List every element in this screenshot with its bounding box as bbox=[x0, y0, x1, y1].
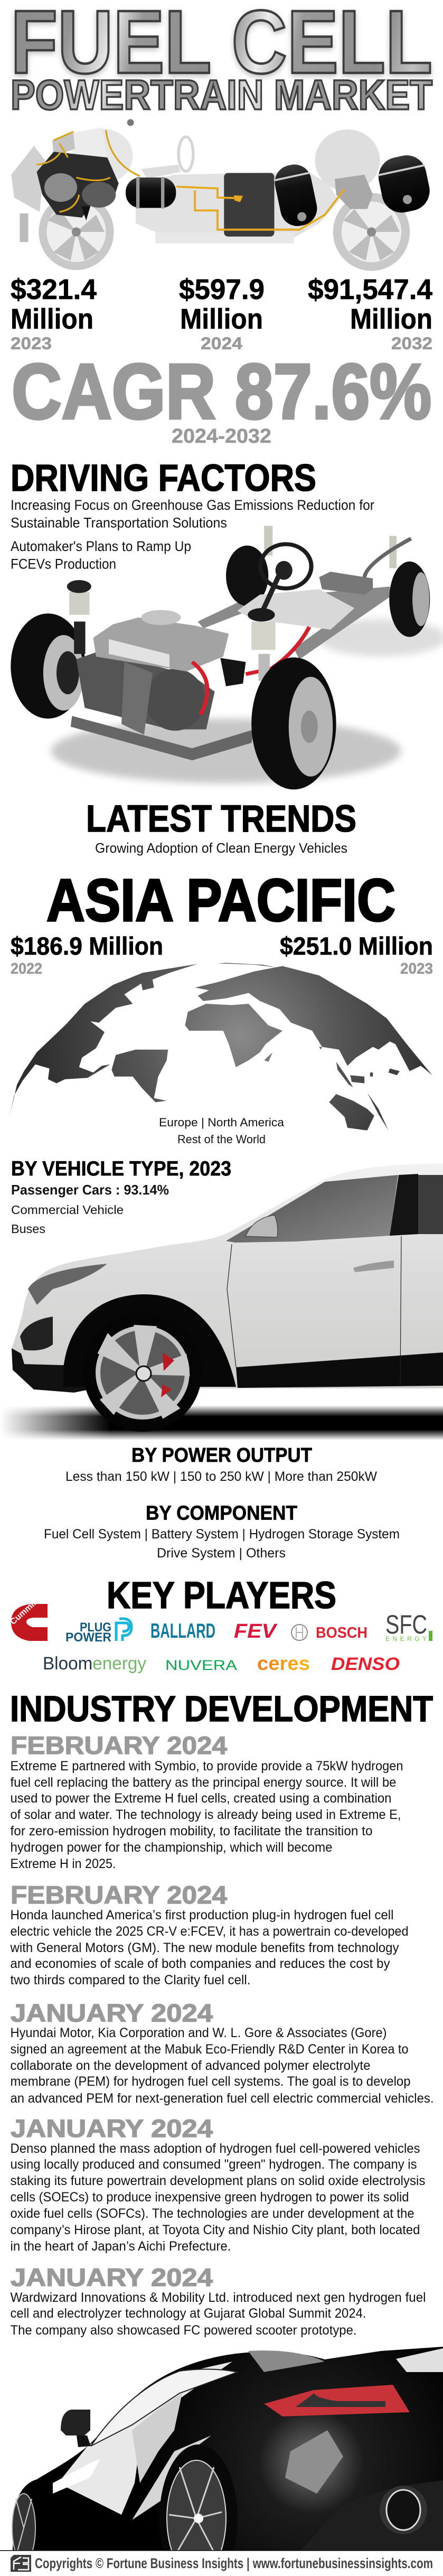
development: January 2024 Hyundai bbox=[11, 1999, 434, 2106]
development: January 2024 Hyundai: collaborate on the development of advanced polymer electrolyte bbox=[11, 2058, 371, 2073]
development: January 2024 Denso bbox=[11, 2114, 426, 2254]
regional stat 2022: 2022 bbox=[11, 960, 42, 977]
development: January 2024 Hyundai: an advanced PEM for next-generation fuel cell electric commercial vehicles. bbox=[11, 2091, 434, 2106]
rear wheels bbox=[226, 546, 430, 637]
logo: Cummins bbox=[8, 1594, 48, 1641]
front left wheel bbox=[11, 613, 86, 718]
development: February 2024 Extreme E: Extreme E partnered with Symbio, to provide provide a 75kW hydrogen bbox=[11, 1759, 403, 1774]
wheel arch bbox=[63, 1294, 236, 1387]
development: January 2024 Hyundai: membrane (PEM) for hydrogen fuel cell systems. The goal is to develop bbox=[11, 2074, 411, 2089]
development: January 2024 Denso: in the heart of Japan’s Aichi Prefecture. bbox=[11, 2239, 231, 2254]
car body bbox=[13, 2347, 443, 2550]
market stat 2032: $91,547.4 bbox=[308, 274, 432, 305]
steering wheel bbox=[260, 544, 312, 611]
logo: Bosch bbox=[291, 1625, 367, 1641]
market stat 2023: 2023 bbox=[11, 334, 52, 353]
development: February 2024 Extreme E: fuel cell replacing the battery as the principal energy source. It will be bbox=[11, 1775, 396, 1790]
illustration: black sports car bbox=[12, 2347, 443, 2550]
mirror bbox=[246, 1215, 278, 1237]
market stat 2023: Million bbox=[11, 303, 93, 335]
regional stat 2022 bbox=[11, 932, 163, 977]
CAGR period: 2024-2032 bbox=[172, 425, 271, 447]
development: January 2024 Denso: cells (SOECs) to produce inexpensive green hydrogen to power its solid bbox=[11, 2190, 409, 2205]
rear posts bbox=[264, 526, 272, 556]
heading: driving factors: DRIVING FACTORS bbox=[11, 458, 316, 499]
exhaust bbox=[380, 2486, 427, 2534]
vehicle type list: Buses bbox=[11, 1222, 45, 1236]
regional stat 2023 bbox=[280, 932, 433, 977]
sensor cap bbox=[127, 119, 134, 126]
other regions list: Europe | North America bbox=[159, 1116, 284, 1129]
yellow hydrogen line bbox=[176, 186, 345, 230]
market stat 2023 bbox=[11, 274, 97, 353]
logo: Ceres: ceres bbox=[257, 1653, 310, 1674]
market stat 2024: 2024 bbox=[201, 334, 242, 353]
logo: SFC Energy: ENERGY bbox=[385, 1635, 427, 1642]
fog light bbox=[20, 1317, 53, 1350]
development: January 2024 Denso: JANUARY 2024 bbox=[11, 2114, 213, 2142]
logo: Nuvera: NUVERA bbox=[165, 1657, 237, 1673]
regional stat 2023: $251.0 Million bbox=[280, 932, 433, 960]
development: January 2024 Wardwizard: The company also showcased FC powered scooter prototype. bbox=[11, 2323, 357, 2338]
latest trends text: Growing Adoption of Clean Energy Vehicles bbox=[95, 840, 347, 856]
car shadow bbox=[0, 1405, 443, 1440]
development: January 2024 Denso: oxide fuel cells (SOFCs). The technologies are under development at the bbox=[11, 2206, 414, 2221]
development: January 2024 Wardwizard: cell and electrolyzer technology at Gujarat Global Summit 2024. bbox=[11, 2306, 366, 2321]
other regions list bbox=[159, 1116, 284, 1146]
logo: SFC Energy: SFC bbox=[385, 1610, 427, 1639]
development: February 2024 Extreme E bbox=[11, 1731, 403, 1871]
development: February 2024 Honda: two thirds compared to the Clarity fuel cell. bbox=[11, 1973, 250, 1987]
door seams bbox=[227, 1236, 401, 1384]
development: February 2024 Honda: and economies of scale of both companies and reduces the cost by bbox=[11, 1956, 390, 1971]
heading: by component: BY COMPONENT bbox=[146, 1502, 297, 1525]
front wheel bbox=[86, 1325, 200, 1432]
development: January 2024 Wardwizard bbox=[11, 2263, 426, 2338]
development: February 2024 Honda: electric vehicle the 2025 CR-V e:FCEV, it has a powertrain co-developed bbox=[11, 1924, 409, 1939]
bumper bbox=[12, 1348, 90, 1393]
logo: Plug Power: POWER bbox=[65, 1630, 111, 1645]
heading: by vehicle type: BY VEHICLE TYPE, 2023 bbox=[11, 1158, 231, 1180]
driving factors list: FCEVs Production bbox=[11, 556, 116, 572]
development: January 2024 Wardwizard: JANUARY 2024 bbox=[11, 2263, 213, 2291]
vehicle type list bbox=[11, 1182, 169, 1236]
component list: Drive System | Others bbox=[157, 1546, 286, 1561]
illustration: white car bbox=[0, 1163, 443, 1440]
logo: Bosch: BOSCH bbox=[316, 1625, 367, 1641]
heading: latest trends: LATEST TRENDS bbox=[86, 798, 356, 840]
development: January 2024 Hyundai: signed an agreement at the Mabuk Eco-Friendly R&D Center in Korea to bbox=[11, 2042, 409, 2057]
side window bbox=[91, 2369, 238, 2446]
mirror bbox=[61, 2410, 91, 2447]
rear wheel bbox=[161, 2444, 238, 2550]
development: February 2024 Extreme E: hydrogen power for the championship, which will become bbox=[11, 1840, 333, 1855]
component list: Fuel Cell System | Battery System | Hydrogen Storage System bbox=[44, 1527, 400, 1542]
market stat 2024: $597.9 bbox=[179, 274, 265, 305]
vehicle type list: Commercial Vehicle bbox=[11, 1203, 124, 1217]
development: January 2024 Hyundai: JANUARY 2024 bbox=[11, 1999, 213, 2027]
rear motor bbox=[335, 175, 373, 209]
rear wheel bbox=[333, 193, 410, 271]
heading: by power output: BY POWER OUTPUT bbox=[131, 1444, 312, 1467]
logo: Cummins: Cummins bbox=[8, 1594, 44, 1627]
development: February 2024 Honda: Honda launched America’s first production plug-in hydrogen fuel cell bbox=[11, 1908, 394, 1922]
frame rails bbox=[197, 586, 391, 659]
market stat 2032: Million bbox=[350, 303, 432, 335]
development: February 2024 Extreme E: for zero-emission hydrogen mobility, to facilitate the transition to bbox=[11, 1824, 373, 1838]
logo: Plug Power bbox=[65, 1619, 131, 1645]
fuel cell engine block bbox=[37, 127, 140, 220]
icon: Fortune Business Insights logo bbox=[11, 2555, 31, 2572]
hydrogen tank 2 bbox=[271, 161, 320, 229]
door handle bbox=[353, 1261, 394, 1272]
driving factors list: Automaker's Plans to Ramp Up bbox=[11, 538, 191, 554]
motor bbox=[76, 651, 215, 735]
power output list: Less than 150 kW | 150 to 250 kW | More than 250kW bbox=[65, 1469, 377, 1484]
hydrogen tank 3 bbox=[375, 152, 433, 216]
gearbox housing bbox=[93, 610, 229, 671]
headlight bbox=[28, 1264, 107, 1305]
development: January 2024 Hyundai: Hyundai Motor, Kia Corporation and W. L. Gore & Associates (Gore) bbox=[11, 2026, 387, 2040]
regional stat 2023: 2023 bbox=[400, 960, 433, 977]
battery plate bbox=[237, 589, 354, 630]
driving factors list bbox=[11, 497, 374, 572]
market stat 2024 bbox=[179, 274, 265, 353]
front wheel bbox=[39, 194, 114, 270]
component list bbox=[44, 1527, 400, 1561]
window rear bbox=[418, 1175, 443, 1234]
lower diffuser bbox=[301, 2480, 443, 2550]
market stat 2032: 2032 bbox=[391, 334, 432, 353]
market stat 2032 bbox=[308, 274, 432, 353]
car body bbox=[12, 1163, 443, 1388]
left suspension bbox=[67, 580, 91, 654]
world map globe bbox=[10, 963, 432, 1131]
development: February 2024 Extreme E: used to power the Extreme H fuel cells, created using a combination bbox=[11, 1791, 392, 1806]
development: January 2024 Denso: Denso planned the mass adoption of hydrogen fuel cell-powered vehicles bbox=[11, 2141, 420, 2156]
window pillar bbox=[390, 1174, 418, 1236]
logo: Denso: DENSO bbox=[331, 1654, 400, 1674]
title bbox=[11, 0, 432, 118]
logo: Bloom Energy: Bloomenergy bbox=[43, 1654, 146, 1674]
battery pack bbox=[224, 173, 274, 237]
development: February 2024 Honda: FEBRUARY 2024 bbox=[11, 1881, 227, 1909]
illustration: fuel cell chassis bbox=[11, 119, 433, 271]
tail light bbox=[264, 2385, 410, 2416]
heading: Asia Pacific: ASIA PACIFIC bbox=[46, 867, 395, 934]
market stat 2023: $321.4 bbox=[11, 274, 97, 305]
driving factors list: Sustainable Transportation Solutions bbox=[11, 515, 227, 530]
footer bbox=[0, 2550, 443, 2572]
window front bbox=[226, 1175, 398, 1243]
logo: Plug Power: PLUG bbox=[80, 1620, 111, 1635]
development: January 2024 Wardwizard: Wardwizard Innovations & Mobility Ltd. introduced next gen hydrogen fuel bbox=[11, 2290, 426, 2305]
other regions list: Rest of the World bbox=[177, 1133, 266, 1146]
vehicle type list: Passenger Cars : 93.14% bbox=[11, 1182, 169, 1198]
illustration: electric skateboard chassis bbox=[11, 526, 443, 789]
front right wheel bbox=[251, 657, 336, 789]
regional stat 2022: $186.9 Million bbox=[11, 932, 163, 960]
heading: key players: KEY PLAYERS bbox=[107, 1575, 336, 1617]
subframe bbox=[71, 716, 254, 760]
development: January 2024 Denso: using locally produced and consumed "green" hydrogen. The company is bbox=[11, 2157, 417, 2172]
market stat 2024: Million bbox=[180, 303, 263, 335]
logo: Ballard: BALLARD bbox=[150, 1620, 215, 1642]
development: January 2024 Denso: staking its future powertrain development plans on solid oxide electrolysis bbox=[11, 2173, 426, 2188]
right suspension bbox=[248, 608, 276, 681]
logo: FEV: FEV bbox=[234, 1620, 278, 1642]
development: February 2024 Extreme E: Extreme H in 2025. bbox=[11, 1856, 116, 1871]
hydrogen tank 1 bbox=[126, 178, 176, 208]
development: February 2024 Extreme E: of solar and water. The technology is already being used in Extreme E, bbox=[11, 1807, 401, 1822]
development: January 2024 Denso: company’s Hirose plant, at Toyota City and Nishio City plant, both located bbox=[11, 2223, 420, 2237]
development: February 2024 Honda bbox=[10, 1881, 409, 1987]
sill bbox=[236, 1352, 443, 1388]
driving factors list: Increasing Focus on Greenhouse Gas Emissions Reduction for bbox=[11, 497, 374, 513]
development: February 2024 Extreme E: FEBRUARY 2024 bbox=[11, 1731, 227, 1759]
white reflection panels bbox=[58, 2362, 232, 2515]
development: February 2024 Honda: with General Motors (GM). The new module benefits from technology bbox=[10, 1940, 399, 1955]
rear deck light reflection bbox=[396, 2348, 443, 2372]
red cable bbox=[192, 627, 309, 715]
front wheel bbox=[12, 2493, 36, 2550]
rear box bbox=[319, 572, 373, 595]
control box bbox=[220, 658, 246, 686]
